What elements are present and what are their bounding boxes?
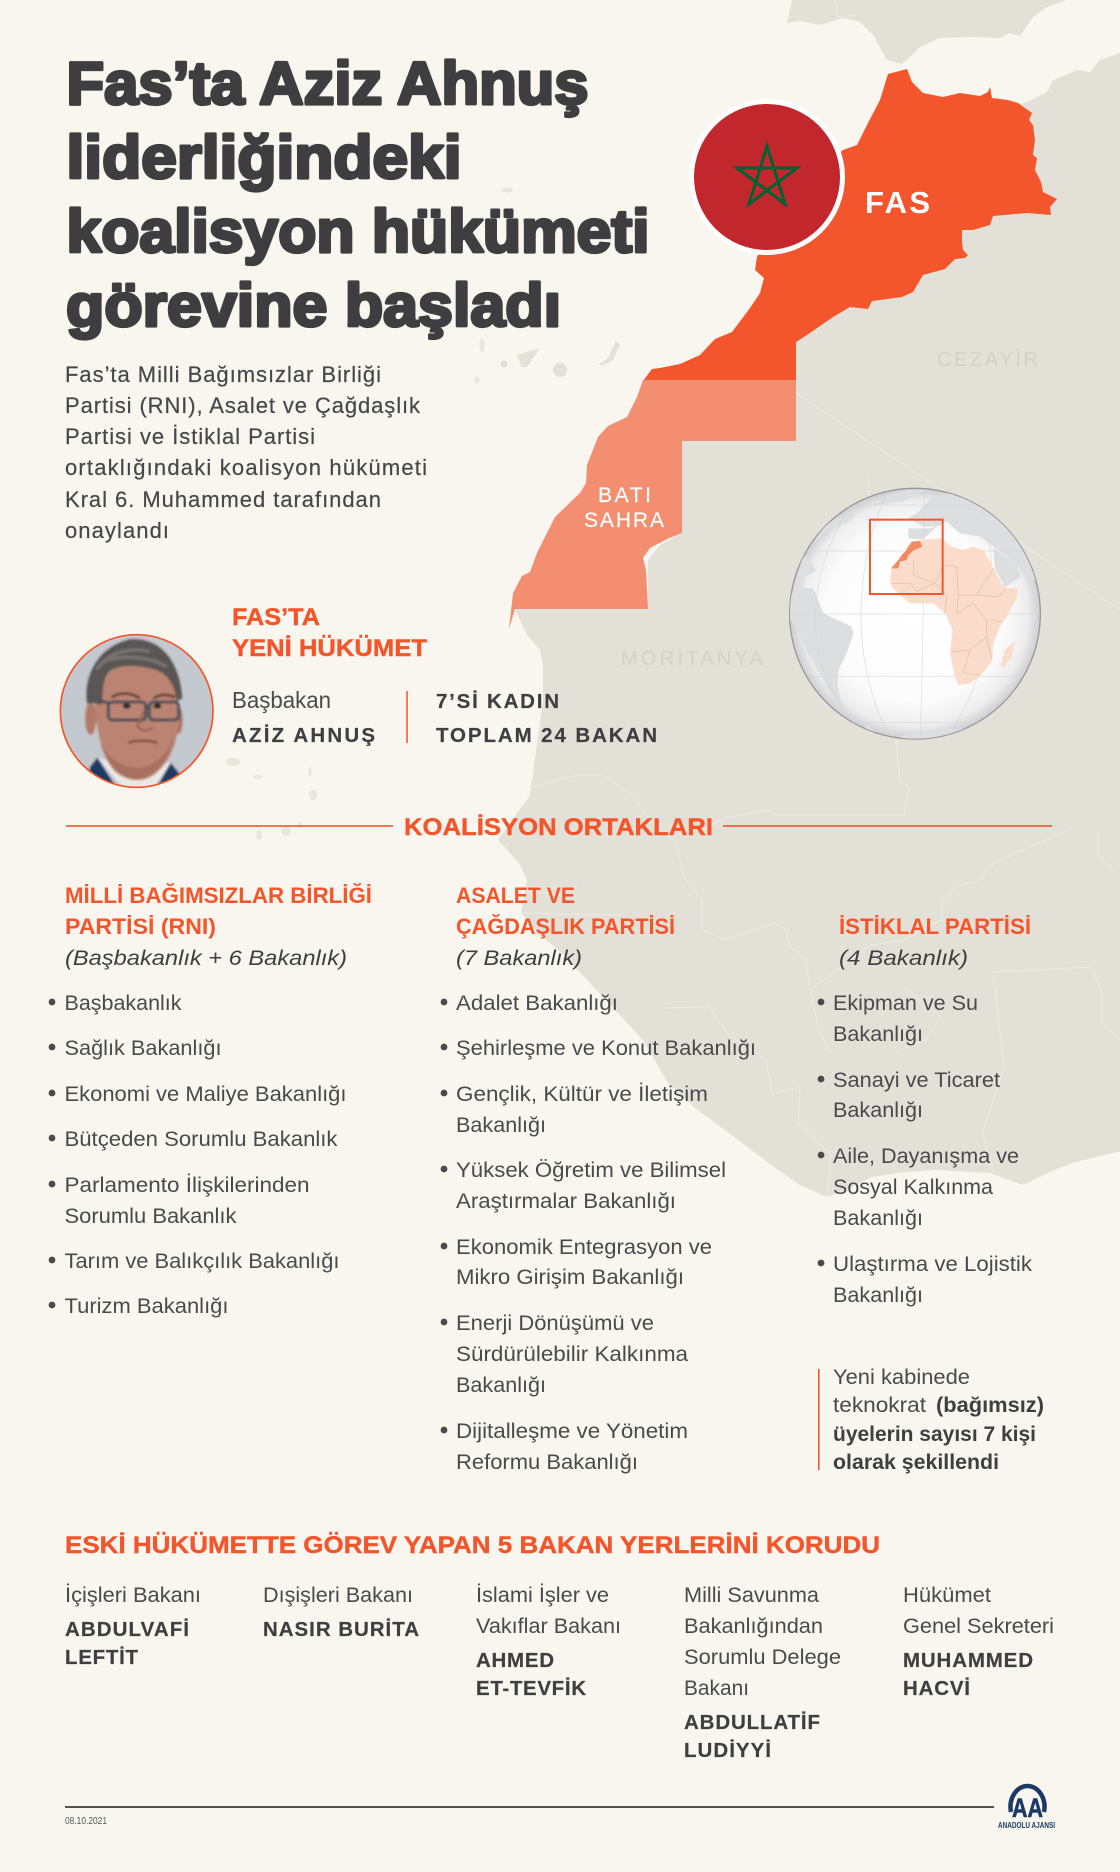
- heading: five ministers kept posts: ESKİ HÜKÜMETTE GÖREV YAPAN 5 BAKAN YERLERİNİ KORUDU: [65, 1532, 880, 1559]
- minister: Ahmed et-Tevfik: Vakıflar Bakanı: [476, 1614, 621, 1638]
- minister: Abdullatif Ludiyyi: Milli Savunma: [684, 1583, 819, 1607]
- minister: Abdulvafi Leftit: [65, 1583, 201, 1669]
- ministry list: PAM: Yüksek Öğretim ve Bilimsel: [456, 1158, 726, 1182]
- minister: Abdullatif Ludiyyi: LUDİYYİ: [684, 1739, 771, 1762]
- minister: Abdulvafi Leftit: İçişleri Bakanı: [65, 1583, 201, 1607]
- cabinet stats: [436, 690, 657, 747]
- logo: Anadolu Ajansı: AA: [1012, 1793, 1043, 1823]
- callout: technocrat members: olarak şekillendi: [833, 1450, 999, 1474]
- title: liderliğindeki: [66, 124, 462, 191]
- portrait: Aziz Ahnuş: [57, 630, 217, 793]
- ministry list: PAM: Bakanlığı: [456, 1373, 546, 1397]
- icon: Moroccan flag: [692, 102, 842, 252]
- map: surrounding land: [226, 0, 1120, 1197]
- party heading: RNI: (Başbakanlık + 6 Bakanlık): [65, 946, 347, 970]
- minister: Muhammed Hacvi: [903, 1583, 1054, 1700]
- cabinet stats: 7’Sİ KADIN: [436, 690, 559, 713]
- divider: [406, 691, 408, 743]
- ministry list: Istiqlal: Sanayi ve Ticaret: [833, 1068, 1000, 1092]
- cabinet stats: TOPLAM 24 BAKAN: [436, 724, 657, 747]
- minister: Abdullatif Ludiyyi: ABDULLATİF: [684, 1711, 820, 1734]
- ministry list: RNI: Bütçeden Sorumlu Bakanlık: [64, 1127, 338, 1151]
- map label: Cezayir: CEZAYİR: [937, 348, 1038, 371]
- intro paragraph: Kral 6. Muhammed tarafından: [65, 487, 381, 512]
- ministry list: PAM: Dijitalleşme ve Yönetim: [456, 1419, 688, 1443]
- section heading: coalition partners: KOALİSYON ORTAKLARI: [404, 814, 713, 841]
- logo: Anadolu Ajansı: ANADOLU AJANSI: [998, 1820, 1055, 1830]
- map: Western Sahara: [509, 380, 796, 629]
- title: [66, 50, 650, 339]
- minister: Abdullatif Ludiyyi: Bakanı: [684, 1676, 749, 1700]
- ministry list: PAM: Şehirleşme ve Konut Bakanlığı: [456, 1036, 756, 1060]
- ministry list: PAM: Bakanlığı: [456, 1113, 546, 1137]
- ministry list: Istiqlal: Bakanlığı: [833, 1283, 923, 1307]
- party heading: Istiqlal: (4 Bakanlık): [839, 946, 968, 970]
- minister: Ahmed et-Tevfik: ET-TEVFİK: [476, 1677, 586, 1700]
- minister: Abdullatif Ludiyyi: [684, 1583, 841, 1762]
- prime minister: AZİZ AHNUŞ: [232, 724, 375, 747]
- heading: new government: [232, 604, 427, 662]
- minister: Nasır Burita: [263, 1583, 419, 1641]
- minister: Ahmed et-Tevfik: AHMED: [476, 1649, 554, 1672]
- ministry list: RNI: Sorumlu Bakanlık: [64, 1204, 237, 1228]
- ministry list: PAM: Enerji Dönüşümü ve: [456, 1311, 654, 1335]
- minister: Nasır Burita: NASIR BURİTA: [263, 1618, 419, 1641]
- callout: technocrat members: (bağımsız): [936, 1393, 1044, 1417]
- map label: Moritanya: MORİTANYA: [621, 647, 764, 670]
- callout: technocrat members: Yeni kabinede: [833, 1365, 970, 1389]
- party heading: PAM: [456, 883, 675, 970]
- minister: Abdulvafi Leftit: ABDULVAFİ: [65, 1618, 189, 1641]
- panel: Asalet ve Çağdaşlık: [441, 883, 756, 1474]
- ministry list: PAM: Adalet Bakanlığı: [456, 991, 618, 1015]
- ministry list: PAM: Mikro Girişim Bakanlığı: [456, 1265, 684, 1289]
- ministry list: Istiqlal: [818, 991, 1032, 1307]
- ministry list: Istiqlal: Bakanlığı: [833, 1022, 923, 1046]
- callout: technocrat members: [818, 1365, 1044, 1474]
- ministry list: RNI: Tarım ve Balıkçılık Bakanlığı: [64, 1249, 340, 1273]
- ministry list: PAM: Ekonomik Entegrasyon ve: [456, 1235, 712, 1259]
- panel: İstiklal Partisi: [818, 914, 1032, 1307]
- ministry list: RNI: Ekonomi ve Maliye Bakanlığı: [64, 1082, 346, 1106]
- intro paragraph: ortaklığındaki koalisyon hükümeti: [65, 455, 427, 480]
- ministry list: PAM: [441, 991, 756, 1474]
- party heading: Istiqlal: İSTİKLAL PARTİSİ: [839, 914, 1031, 939]
- footer rule: [65, 1806, 994, 1808]
- ministry list: Istiqlal: Ekipman ve Su: [833, 991, 978, 1015]
- party heading: PAM: ÇAĞDAŞLIK PARTİSİ: [456, 914, 675, 939]
- ministry list: PAM: Araştırmalar Bakanlığı: [456, 1189, 676, 1213]
- minister: Nasır Burita: Dışişleri Bakanı: [263, 1583, 413, 1607]
- ministry list: PAM: Gençlik, Kültür ve İletişim: [456, 1082, 708, 1106]
- ministry list: RNI: Turizm Bakanlığı: [64, 1294, 228, 1318]
- ministry list: Istiqlal: Bakanlığı: [833, 1098, 923, 1122]
- intro paragraph: [65, 362, 427, 543]
- ministry list: Istiqlal: Bakanlığı: [833, 1206, 923, 1230]
- intro paragraph: Partisi (RNI), Asalet ve Çağdaşlık: [65, 393, 421, 418]
- panel: RNI: [49, 883, 372, 1318]
- minister: Abdullatif Ludiyyi: Sorumlu Delege: [684, 1645, 841, 1669]
- ministry list: PAM: Sürdürülebilir Kalkınma: [456, 1342, 688, 1366]
- minister: Ahmed et-Tevfik: İslami İşler ve: [476, 1583, 609, 1607]
- map label: FAS: FAS: [865, 185, 930, 220]
- party heading: RNI: PARTİSİ (RNI): [65, 914, 216, 939]
- minister: Muhammed Hacvi: Genel Sekreteri: [903, 1614, 1054, 1638]
- intro paragraph: Partisi ve İstiklal Partisi: [65, 424, 315, 449]
- party heading: PAM: ASALET VE: [456, 883, 575, 908]
- heading: new government: YENİ HÜKÜMET: [232, 635, 427, 662]
- ministry list: Istiqlal: Aile, Dayanışma ve: [833, 1144, 1019, 1168]
- minister: Abdulvafi Leftit: LEFTİT: [65, 1646, 138, 1669]
- minister: Abdullatif Ludiyyi: Bakanlığından: [684, 1614, 823, 1638]
- ministry list: Istiqlal: Ulaştırma ve Lojistik: [833, 1252, 1032, 1276]
- minister: Muhammed Hacvi: MUHAMMED: [903, 1649, 1033, 1672]
- map: Morocco: [643, 69, 1057, 381]
- ministry list: RNI: Sağlık Bakanlığı: [64, 1036, 222, 1060]
- minister: Muhammed Hacvi: HACVİ: [903, 1677, 970, 1700]
- prime minister: [232, 687, 375, 747]
- party heading: RNI: MİLLİ BAĞIMSIZLAR BİRLİĞİ: [65, 883, 372, 908]
- ministry list: RNI: Parlamento İlişkilerinden: [64, 1173, 310, 1197]
- map label: Batı Sahra: BATI: [598, 484, 651, 507]
- heading: new government: FAS’TA: [232, 604, 320, 631]
- minister: Ahmed et-Tevfik: [476, 1583, 621, 1700]
- map label: Batı Sahra: SAHRA: [584, 509, 664, 532]
- minister: Muhammed Hacvi: Hükümet: [903, 1583, 991, 1607]
- title: görevine başladı: [66, 272, 561, 339]
- intro paragraph: Fas’ta Milli Bağımsızlar Birliği: [65, 362, 381, 387]
- callout: technocrat members: teknokrat: [833, 1393, 926, 1417]
- date: 08.10.2021: [65, 1816, 107, 1827]
- title: koalisyon hükümeti: [66, 198, 650, 265]
- logo: Anadolu Ajansı: [998, 1786, 1055, 1830]
- intro paragraph: onaylandı: [65, 518, 169, 543]
- ministry list: Istiqlal: Sosyal Kalkınma: [833, 1175, 993, 1199]
- ministry list: RNI: Başbakanlık: [64, 991, 182, 1015]
- locator globe: [780, 488, 1042, 743]
- ministry list: RNI: [49, 991, 346, 1318]
- callout: technocrat members: üyelerin sayısı 7 kişi: [833, 1422, 1036, 1446]
- ministry list: PAM: Reformu Bakanlığı: [456, 1450, 638, 1474]
- map label: Batı Sahra: [584, 484, 664, 532]
- party heading: Istiqlal: [839, 914, 1031, 970]
- map: country borders: [520, 0, 1120, 1197]
- prime minister: Başbakan: [232, 687, 331, 713]
- title: Fas’ta Aziz Ahnuş: [66, 50, 588, 117]
- party heading: RNI: [65, 883, 372, 970]
- party heading: PAM: (7 Bakanlık): [456, 946, 582, 970]
